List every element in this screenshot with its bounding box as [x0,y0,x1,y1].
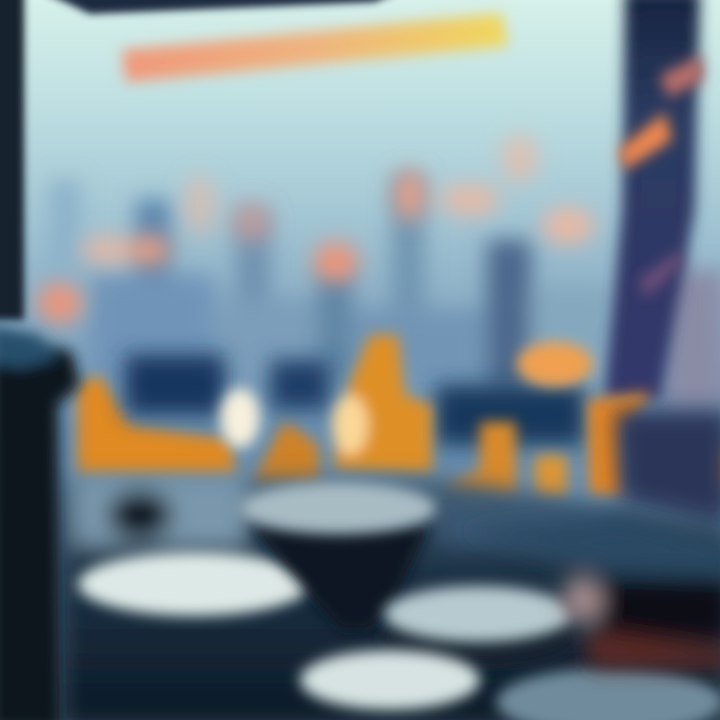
orange banner [122,13,508,82]
table 2 with dark glass [240,482,436,630]
table 3 [380,586,576,664]
peach chart line over skyline [38,134,594,323]
right orange blocks [448,342,720,498]
right navy tower [605,0,704,400]
orange lit buildings band [78,335,720,498]
cafe tables [78,482,720,720]
top dark beam [40,0,400,14]
orange base left [78,375,320,488]
lower floor and dark furniture mass [60,410,720,720]
table 5 [496,668,720,720]
dark blue building tops [125,355,585,445]
table 4 [300,650,480,710]
left dark column and ledge [0,325,80,720]
tower orange streaks [618,55,704,298]
tower body [605,0,700,400]
left dark window frame [0,0,24,320]
central glowing tower [220,335,432,474]
table 1 [78,552,310,616]
right lower dark ledge with red glow [460,515,720,668]
distant skyline buildings [50,175,720,410]
